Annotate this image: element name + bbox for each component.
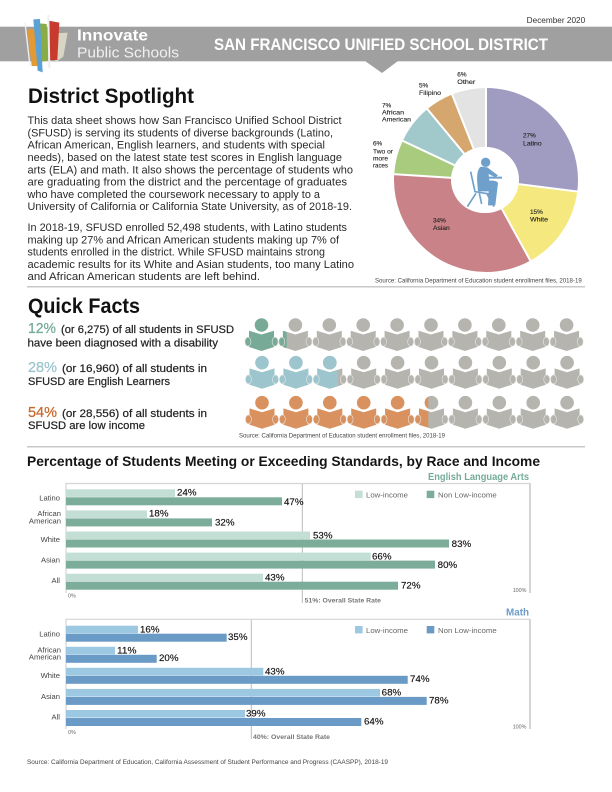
bars: Asian Math: 68% — [382, 688, 402, 699]
category labels Math: Asian — [41, 692, 60, 701]
bar chart: Math: 0% — [68, 730, 76, 736]
bars: All ELA: 43% — [265, 572, 285, 583]
bars: White Math — [66, 666, 430, 685]
legend ELA: Low-income — [366, 490, 408, 499]
bar chart: English Language Arts: 100% — [513, 588, 527, 594]
pictogram: 54% low income — [245, 396, 584, 429]
logo: Innovate Public Schools — [25, 15, 179, 72]
category labels Math: All — [52, 713, 60, 722]
source: pictogram: Source: California Department of Education student enrollment files, 2018-19 — [239, 433, 446, 440]
bars: All Math — [66, 709, 384, 727]
bars: All ELA — [66, 572, 421, 592]
bars: Latino Math — [66, 624, 248, 643]
legend Math: Non Low-income — [438, 626, 497, 635]
header title: SAN FRANCISCO UNIFIED SCHOOL DISTRICT — [214, 36, 548, 54]
bar chart: Math — [29, 619, 530, 741]
fact: disability — [28, 321, 234, 350]
pictogram: 12% disability — [245, 318, 583, 351]
heading: chart section: Percentage of Students Meeting or Exceeding Standards, by Race and Income — [27, 454, 540, 469]
bars: White Math: 43% — [265, 666, 285, 677]
text block: intro paragraph: (SFUSD) is serving its students of diverse backgrounds (Latino, — [28, 127, 333, 139]
pie labels: 6% — [373, 141, 383, 148]
donut chart: enrollment by race — [391, 85, 580, 263]
text block: intro paragraph: arts (ELA) and math. It also shows the percentage of students who — [28, 164, 353, 176]
bars: Asian ELA: 80% — [438, 560, 458, 571]
bar chart: Math: 100% — [513, 724, 527, 730]
fact: English learners — [28, 360, 207, 388]
pie labels: 5% — [419, 83, 429, 90]
category labels ELA: Asian — [41, 556, 60, 565]
bars: White ELA — [66, 530, 472, 550]
text block: intro paragraph: University of California or California State University, as of 2018-19. — [28, 201, 352, 213]
fact: low income: SFUSD are low income — [28, 420, 145, 432]
legend ELA: Non Low-income — [438, 490, 497, 499]
pie labels: American — [382, 116, 411, 123]
pie labels: Two or — [373, 148, 394, 155]
category labels Math: Latino — [39, 630, 60, 639]
heading: Quick Facts: Quick Facts — [28, 294, 140, 318]
bars: Asian ELA — [66, 551, 458, 571]
bars: African American Math: 11% — [117, 645, 137, 656]
text block: enrollment paragraph: academic results for its White and Asian students, too many Latino — [28, 259, 354, 271]
date: December 2020 — [527, 16, 586, 25]
fact: English learners: 28% — [28, 360, 57, 376]
text block: enrollment paragraph: and African American students are left behind. — [28, 271, 260, 283]
pie labels: 27% — [523, 132, 536, 139]
pie labels: 6% — [457, 72, 467, 79]
pie labels: Filipino — [419, 90, 441, 97]
fact: disability: (or 6,275) of all students in SFUSD — [61, 324, 234, 336]
category labels Math — [29, 630, 61, 722]
fact: English learners: SFUSD are English Learners — [28, 376, 170, 388]
bars: Asian Math — [66, 688, 449, 706]
bars: African American Math: 20% — [159, 653, 179, 664]
bar chart: Math: 40%: Overall State Rate — [253, 734, 331, 741]
pie labels: White — [530, 216, 548, 223]
category labels Math: White — [41, 671, 60, 680]
category labels ELA: White — [41, 535, 60, 544]
pie labels: Other — [457, 79, 476, 86]
text block: intro paragraph: African American, English learners, and students with special — [28, 140, 325, 152]
category labels ELA: American — [29, 516, 61, 525]
fact: low income: (or 28,556) of all students in — [62, 408, 207, 420]
category labels ELA — [29, 494, 61, 585]
text block: intro paragraph: This data sheet shows how San Francisco Unified School District — [28, 115, 342, 127]
text block: intro paragraph: needs), based on the latest state test scores in English language — [28, 152, 342, 164]
bars: All Math: 64% — [364, 716, 384, 727]
bars: Latino Math: 35% — [228, 632, 248, 643]
bars: Latino ELA: 47% — [284, 497, 304, 508]
bars: African American ELA: 32% — [215, 518, 235, 529]
pie labels: more — [373, 156, 388, 163]
bar chart: English Language Arts — [29, 483, 530, 605]
text block: intro paragraph: are graduating from the district and the percentage of graduates — [28, 177, 347, 189]
pie labels: 7% — [382, 102, 392, 109]
bars: White ELA: 83% — [452, 539, 472, 550]
bars: All Math: 39% — [246, 709, 266, 720]
text block: intro paragraph — [27, 115, 353, 213]
pie labels — [373, 72, 548, 232]
text block: enrollment paragraph: In 2018-19, SFUSD enrolled 52,498 students, with Latino students — [28, 222, 347, 234]
category labels ELA: All — [52, 576, 60, 585]
pictogram: 28% English learners — [245, 356, 584, 389]
category labels Math: American — [29, 652, 61, 661]
fact: English learners: (or 16,960) of all students in — [62, 363, 207, 375]
text block: enrollment paragraph: students enrolled in the district. While SFUSD maintains strong — [28, 247, 325, 259]
pie labels: 15% — [530, 209, 543, 216]
bar chart: English Language Arts: 0% — [68, 594, 76, 600]
pie labels: 34% — [433, 218, 446, 225]
category labels Math: African — [37, 646, 61, 655]
bars: African American ELA: 18% — [149, 509, 169, 520]
bar chart: English Language Arts: 51%: Overall State Rate — [305, 598, 382, 605]
legend Math: Low-income — [366, 626, 408, 635]
category labels ELA: Latino — [39, 494, 60, 503]
text block: intro paragraph: who have completed the coursework necessary to apply to a — [27, 189, 321, 201]
header band — [0, 27, 612, 73]
heading: District Spotlight: District Spotlight — [28, 84, 194, 108]
logo: Innovate Public Schools: Public Schools — [77, 44, 179, 61]
category labels ELA: African — [37, 509, 61, 518]
text block: enrollment paragraph: making up 27% and African American students making up 7% of — [28, 234, 340, 246]
legend Math — [355, 626, 497, 635]
bars: African American ELA — [66, 509, 235, 529]
source: pie: Source: California Department of Education student enrollment files, 2018-19 — [375, 278, 582, 285]
bars: Asian ELA: 66% — [372, 551, 392, 562]
subheading: Math: Math — [506, 607, 529, 619]
icon: student at desk — [467, 158, 502, 207]
fact: low income: 54% — [28, 405, 57, 421]
bars: White Math: 74% — [410, 674, 430, 685]
source: charts: Source: California Department of Education, California Assessment of Student Performance and Progress (CAASPP), 2018-19 — [27, 759, 389, 766]
logo: Innovate Public Schools: Innovate — [77, 28, 148, 45]
fact: disability: 12% — [28, 321, 56, 337]
fact: disability: have been diagnosed with a disability — [28, 338, 219, 350]
fact: low income — [28, 405, 207, 432]
bars: All ELA: 72% — [401, 581, 421, 592]
bars: Latino Math: 16% — [140, 624, 160, 635]
subheading: English Language Arts: English Language Arts — [428, 471, 529, 483]
pie labels: Asian — [433, 225, 450, 232]
text block: enrollment paragraph — [28, 222, 354, 283]
pie labels: Latino — [523, 141, 542, 148]
bars: Asian Math: 78% — [429, 695, 449, 706]
bars: Latino ELA — [66, 488, 304, 508]
bars: White ELA: 53% — [313, 530, 333, 541]
bars: Latino ELA: 24% — [177, 488, 197, 499]
pie labels: races — [373, 162, 388, 169]
pie labels: African — [382, 109, 404, 116]
legend ELA — [355, 490, 497, 499]
bars: African American Math — [66, 645, 179, 664]
